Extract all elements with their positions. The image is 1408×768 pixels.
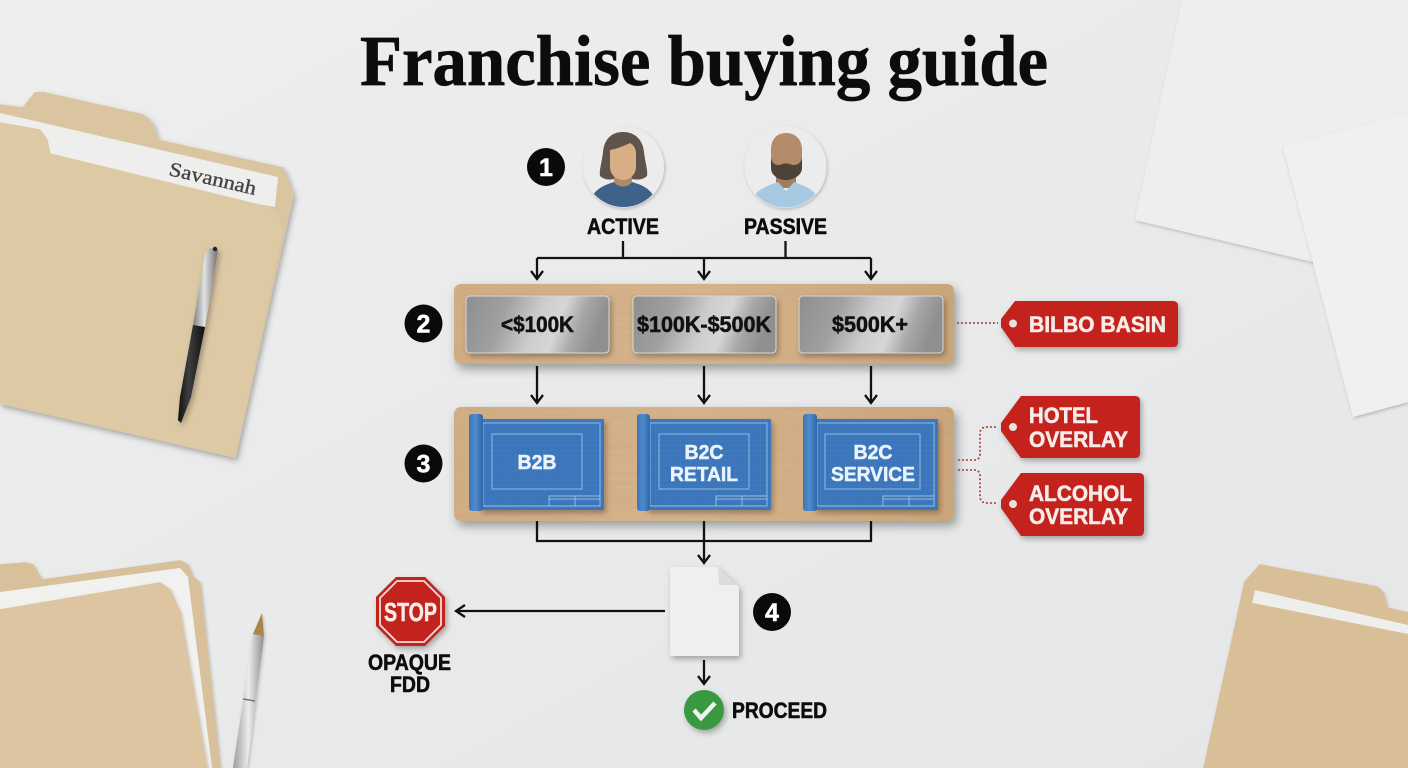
arrow: document to stop: [456, 605, 665, 617]
title: Franchise buying guide: [360, 21, 1048, 101]
panel: business model board: [454, 407, 954, 521]
tag: Alcohol overlay: [1001, 473, 1144, 536]
arrows: investor type to budget: [531, 241, 877, 279]
label: Savannah: Savannah: [167, 158, 259, 200]
blueprint: B2C retail: RETAIL: [670, 464, 738, 486]
icon: document: [670, 567, 739, 656]
blueprint: B2C service: [803, 414, 938, 511]
tag: Alcohol overlay: OVERLAY: [1029, 504, 1128, 529]
tag: Bilbo Basin: BILBO BASIN: [1029, 312, 1166, 337]
label: PASSIVE: PASSIVE: [744, 214, 827, 239]
avatar: passive man: [744, 126, 826, 208]
label: Opaque FDD: OPAQUE: [368, 650, 451, 675]
step 2 badge: [404, 304, 442, 342]
blueprint: B2C service: SERVICE: [831, 464, 915, 486]
avatar: active woman: [583, 126, 664, 208]
blueprint: B2B: B2B: [518, 452, 556, 474]
icon: stop sign: STOP: [384, 597, 437, 627]
plate: under 100K: <$100K: [501, 312, 574, 337]
blueprint: B2C service: B2C: [854, 442, 892, 464]
step 4 badge: [753, 593, 791, 631]
plate: 100K to 500K: [633, 296, 776, 353]
plate: 500K plus: $500K+: [832, 312, 908, 337]
folder bottom left with pen: [0, 561, 264, 768]
step 3 badge: [404, 444, 442, 482]
tag: Hotel overlay: OVERLAY: [1029, 427, 1128, 452]
plate: 100K to 500K: $100K-$500K: [637, 312, 771, 337]
label: ACTIVE: ACTIVE: [587, 214, 659, 239]
step 4 badge: 4: [765, 599, 779, 627]
step 2 badge: 2: [417, 310, 430, 338]
tag: Hotel overlay: [1001, 396, 1140, 458]
blueprint: B2C retail: B2C: [684, 442, 724, 464]
tag: Alcohol overlay: ALCOHOL: [1029, 481, 1132, 506]
tag: Bilbo Basin: [1001, 301, 1178, 347]
blueprint: B2C retail: [637, 414, 771, 511]
arrow: document to proceed: [698, 660, 710, 684]
folder top left with pen: [0, 93, 293, 457]
icon: black and silver pen: [178, 247, 218, 423]
label: Opaque FDD: FDD: [390, 672, 430, 697]
arrows: budget to model: [531, 366, 877, 403]
panel: budget board: [454, 284, 954, 364]
icon: silver pen: [233, 613, 264, 768]
icon: green check: [684, 690, 724, 730]
step 1 badge: 1: [539, 154, 553, 182]
icon: stop sign: [376, 577, 445, 646]
label: Opaque FDD: [368, 650, 451, 697]
tag: Hotel overlay: HOTEL: [1029, 403, 1098, 428]
label: Proceed: PROCEED: [732, 698, 827, 723]
arrow: models merge to document: [537, 521, 871, 563]
plate: under 100K: [466, 296, 609, 353]
folder bottom right: [1204, 565, 1408, 768]
blueprint: B2B: [469, 414, 604, 511]
paper sheets top right: [1135, 0, 1408, 417]
plate: 500K plus: [799, 296, 943, 353]
dotted connectors to tags: [957, 323, 998, 503]
step 3 badge: 3: [417, 450, 430, 478]
step 1 badge: [527, 148, 565, 186]
